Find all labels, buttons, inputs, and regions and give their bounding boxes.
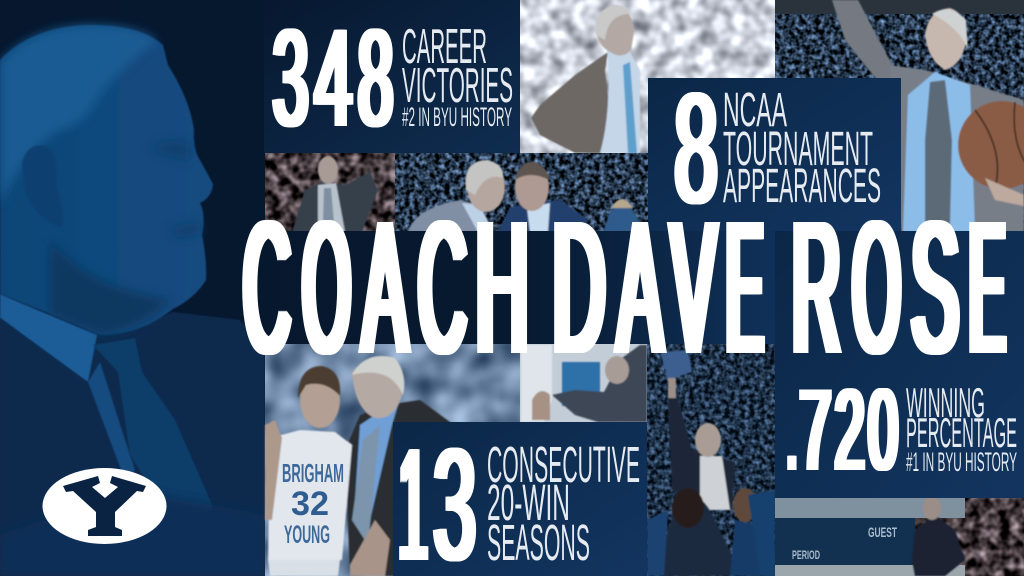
portrait: coach profile in blue duotone	[0, 25, 265, 576]
title: V	[671, 184, 716, 392]
photo: scoreboard and crouching coach: PERIOD	[792, 548, 820, 562]
photo: coach in white crowd	[520, 0, 775, 153]
shirt strip	[88, 362, 135, 480]
photo: coach waving with basketball	[775, 0, 1024, 232]
stat number: 348: 4	[315, 2, 352, 155]
title: R	[792, 184, 840, 392]
title: C	[418, 184, 466, 392]
title: O	[853, 184, 900, 392]
photo: scoreboard and crouching coach	[775, 496, 1024, 576]
panel: winning percentage: 0	[868, 367, 898, 494]
text: #2 IN BYU HISTORY	[402, 102, 512, 132]
title	[243, 184, 1005, 392]
stat label: consecutive 20-win seasons	[487, 436, 640, 571]
stat number: .720	[788, 367, 898, 494]
hair highlights	[0, 25, 158, 205]
stat number: 348: 3	[273, 2, 308, 155]
text: CONSECUTIVE	[487, 436, 640, 493]
tie	[93, 338, 213, 522]
eye and mouth shading	[150, 141, 200, 238]
stat label: winning percentage	[906, 379, 1017, 477]
stat number: .720: .	[788, 367, 796, 494]
stat label: consecutive 20-win seasons: SEASONS	[487, 514, 590, 571]
stat number: .720: 7	[800, 367, 831, 494]
title: A	[363, 184, 407, 392]
photo: coach with player 32	[265, 344, 520, 576]
cover for blur spill beyond the portrait column	[265, 345, 275, 576]
lower jacket	[0, 490, 265, 576]
jacket lapel	[0, 318, 130, 535]
panel: career victories	[264, 0, 520, 155]
panel: career victories: 8	[358, 2, 393, 155]
panel: consecutive seasons	[393, 417, 647, 576]
stat number: 348	[273, 2, 393, 155]
neck shade	[50, 240, 170, 335]
stat label: career victories	[402, 20, 513, 132]
stat number: .720: 2	[835, 367, 864, 494]
title: A	[618, 184, 662, 392]
photo: scoreboard and crouching coach: GUEST	[868, 524, 897, 540]
title: E	[726, 184, 763, 392]
stat label: tournament appearances: NCAA	[723, 84, 787, 137]
photo: coach with player 32: BRIGHAM	[282, 458, 344, 488]
panel: NCAA tournament appearances: 8	[674, 62, 718, 236]
text: VICTORIES	[402, 59, 513, 113]
panel: winning percentage	[775, 231, 1024, 498]
photo: coaches laughing in the stands	[265, 153, 648, 232]
title: C	[243, 184, 290, 392]
photo: coach lifted by players	[647, 344, 775, 576]
title: O	[303, 184, 350, 392]
photo: coach with player 32: 32	[291, 485, 329, 523]
jacket shoulders	[0, 312, 265, 576]
panel: NCAA tournament appearances	[648, 62, 901, 236]
photo: coach with player 32: YOUNG	[284, 521, 330, 549]
collar	[0, 294, 97, 382]
face and hair	[0, 25, 213, 335]
title: H	[476, 184, 528, 392]
stat label: consecutive 20-win seasons: 20-WIN	[487, 474, 570, 531]
logo: BYU oval Y	[42, 468, 166, 544]
ear	[22, 145, 63, 228]
title band	[264, 231, 775, 344]
stat label: tournament appearances	[723, 84, 881, 213]
title: D	[553, 184, 605, 392]
stat label: career victories: CAREER	[402, 20, 487, 74]
photo: coach and sideline player	[520, 344, 647, 422]
